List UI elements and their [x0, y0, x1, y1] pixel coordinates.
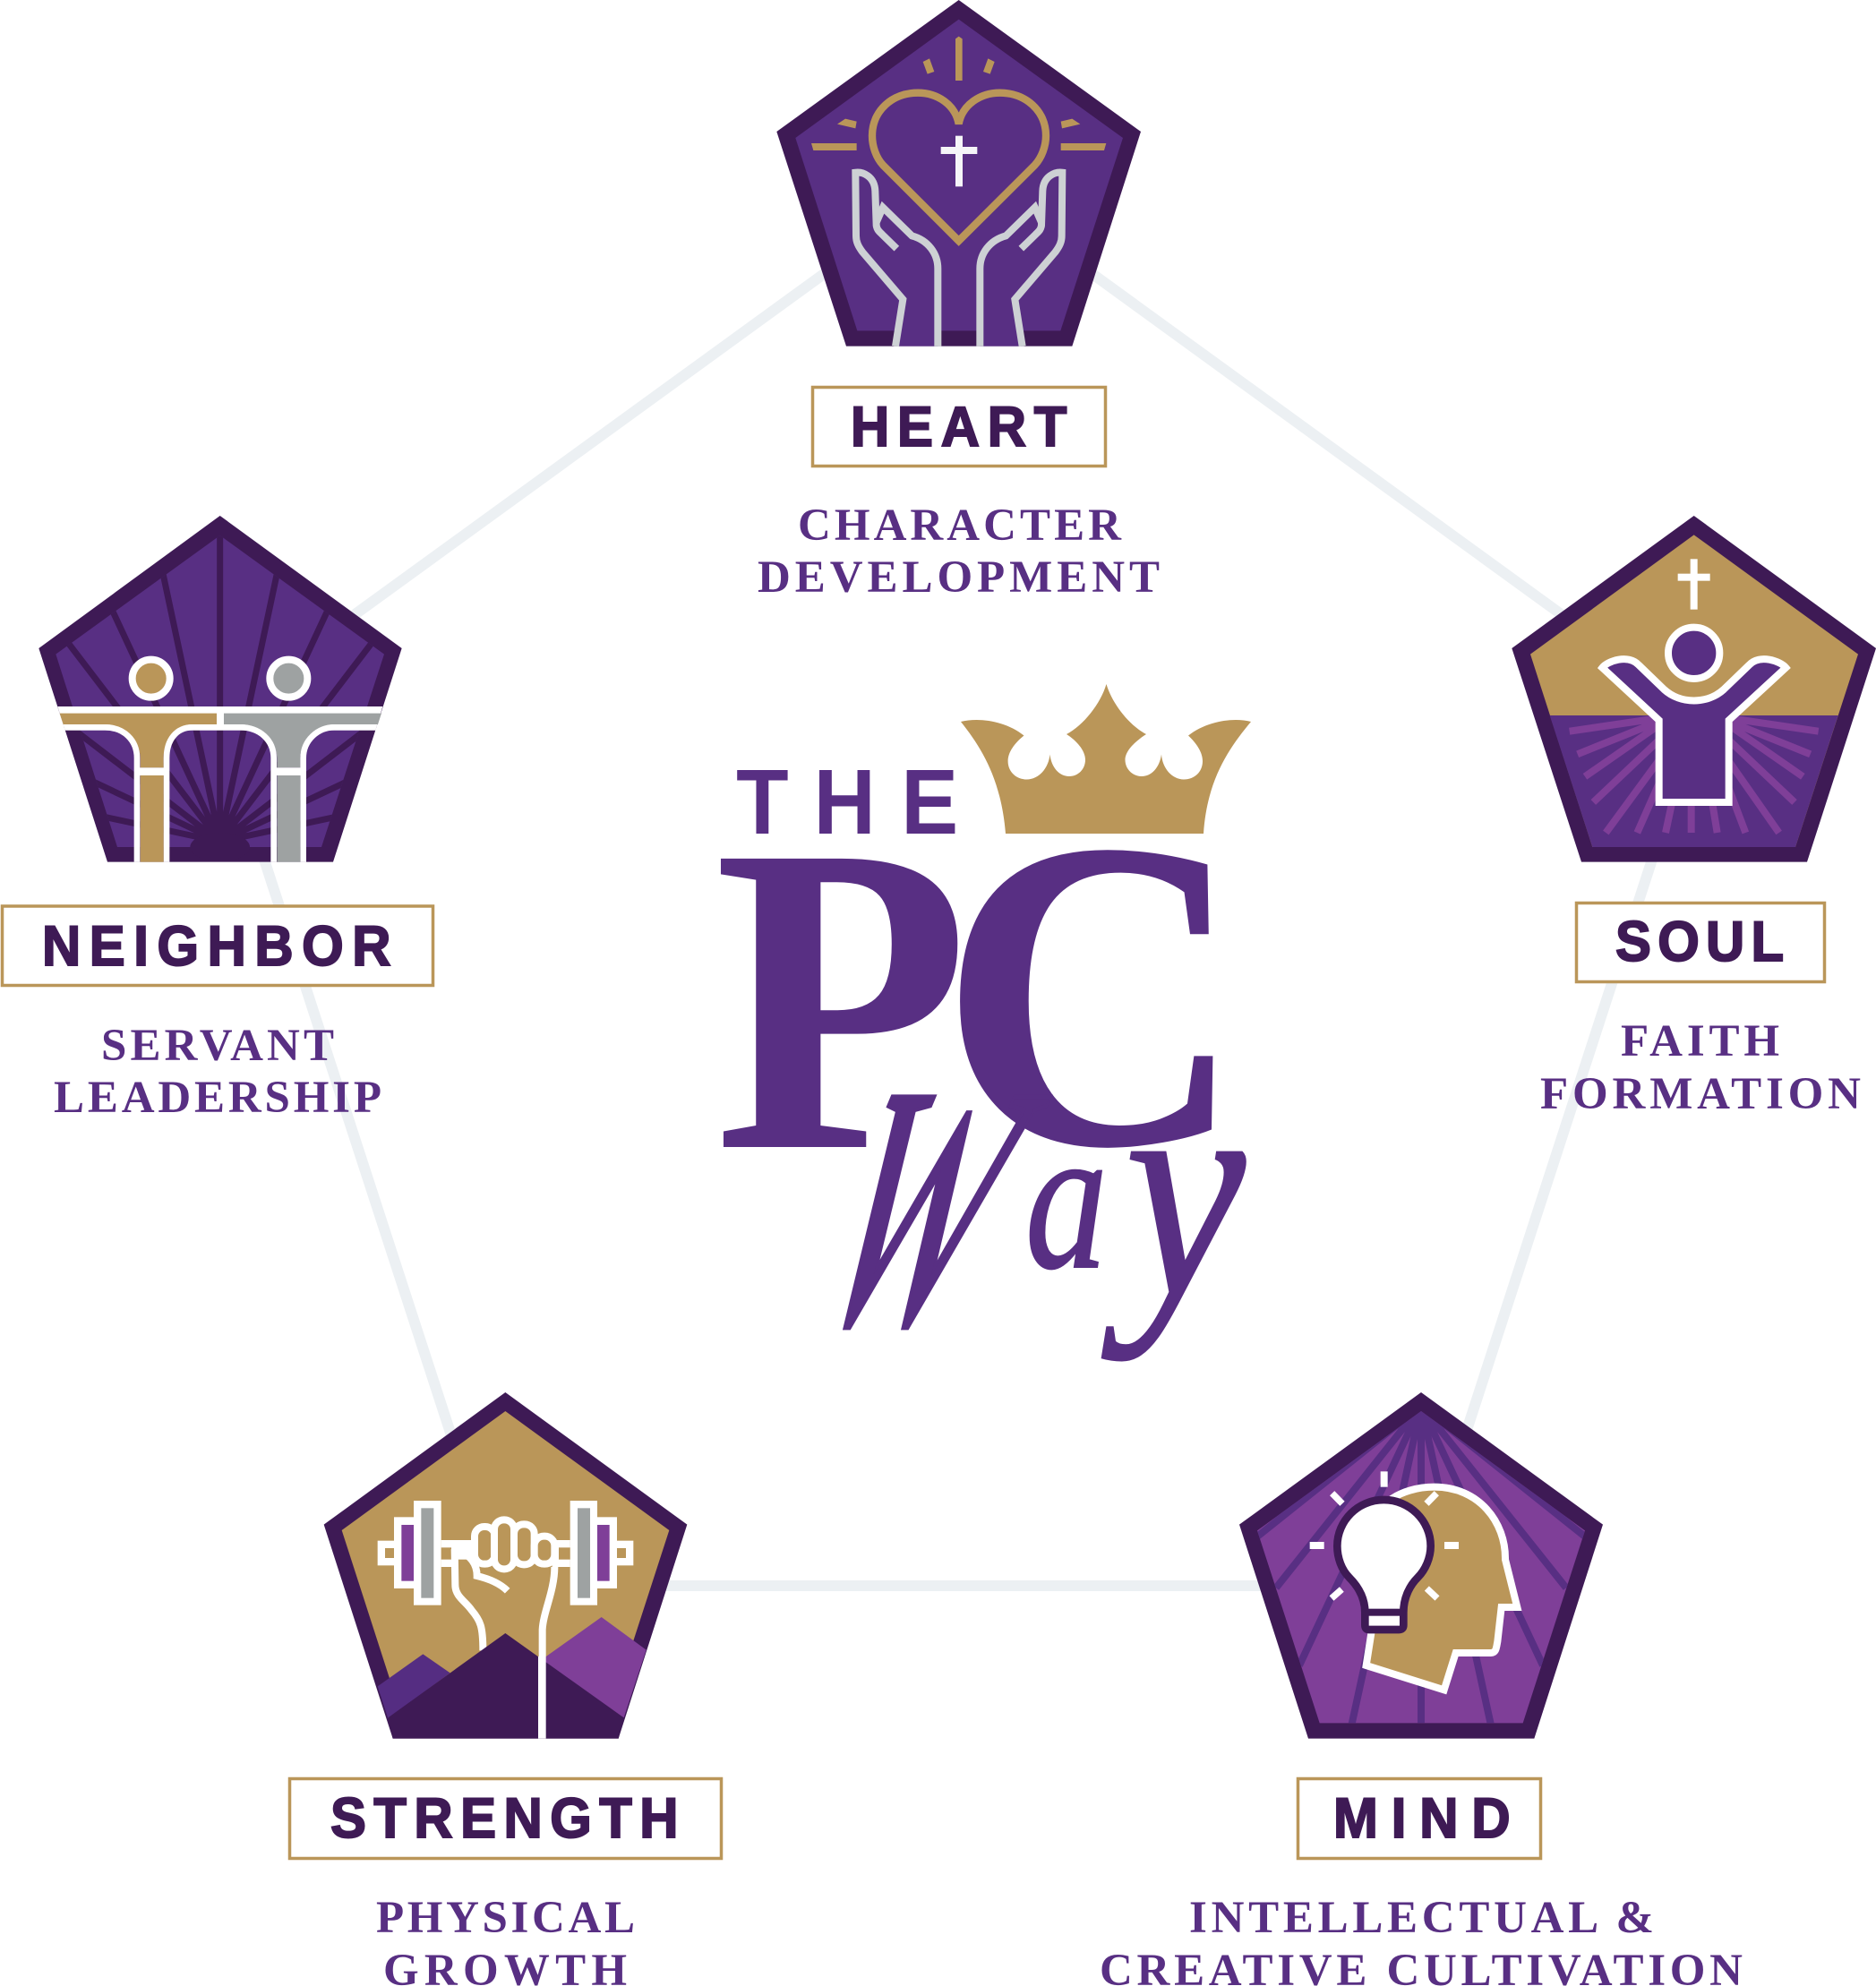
label: neighbor: NEIGHBOR — [42, 915, 391, 978]
text: physical growth — [376, 1893, 635, 1986]
text: THE: THE — [736, 751, 958, 854]
label: strength: STRENGTH — [330, 1787, 679, 1850]
text: character development: CHARACTER — [798, 501, 1122, 551]
label: soul — [1576, 903, 1825, 981]
label: mind — [1298, 1778, 1540, 1859]
icon: crown — [961, 684, 1251, 834]
label: heart — [813, 387, 1105, 466]
label: heart: HEART — [851, 396, 1066, 458]
text: Way script: y — [1100, 1019, 1248, 1361]
icon: neighbor badge — [39, 516, 402, 862]
icon: heart badge — [776, 0, 1141, 347]
text: PC: C — [939, 749, 1245, 1239]
text: Way script: a — [1025, 1084, 1108, 1313]
text: intellectual and creative cultivation: INTELLECTUAL & — [1189, 1893, 1654, 1943]
text: character development — [758, 501, 1160, 603]
logo: The PC Way — [714, 684, 1251, 1397]
text: faith formation — [1540, 1016, 1861, 1119]
text: faith formation: FORMATION — [1540, 1069, 1861, 1119]
text: physical growth: PHYSICAL — [376, 1893, 635, 1943]
icon: strength badge — [324, 1392, 687, 1739]
text: PC — [714, 749, 1245, 1243]
text: Way script — [781, 1015, 1248, 1397]
text: PC: P — [714, 754, 970, 1243]
icon: mind badge — [1239, 1392, 1603, 1739]
label: mind: MIND — [1333, 1787, 1511, 1850]
text: faith formation: FAITH — [1621, 1016, 1779, 1066]
text: servant leadership: SERVANT — [101, 1021, 334, 1071]
text: Way script: W — [781, 1015, 1080, 1397]
text: intellectual and creative cultivation — [1100, 1893, 1743, 1986]
label: strength — [290, 1778, 722, 1859]
text: servant leadership — [54, 1021, 381, 1123]
label: soul: SOUL — [1615, 911, 1784, 973]
icon: soul badge — [1512, 516, 1876, 862]
label: neighbor — [2, 906, 433, 985]
text: servant leadership: LEADERSHIP — [54, 1073, 381, 1123]
text: character development: DEVELOPMENT — [758, 552, 1160, 603]
